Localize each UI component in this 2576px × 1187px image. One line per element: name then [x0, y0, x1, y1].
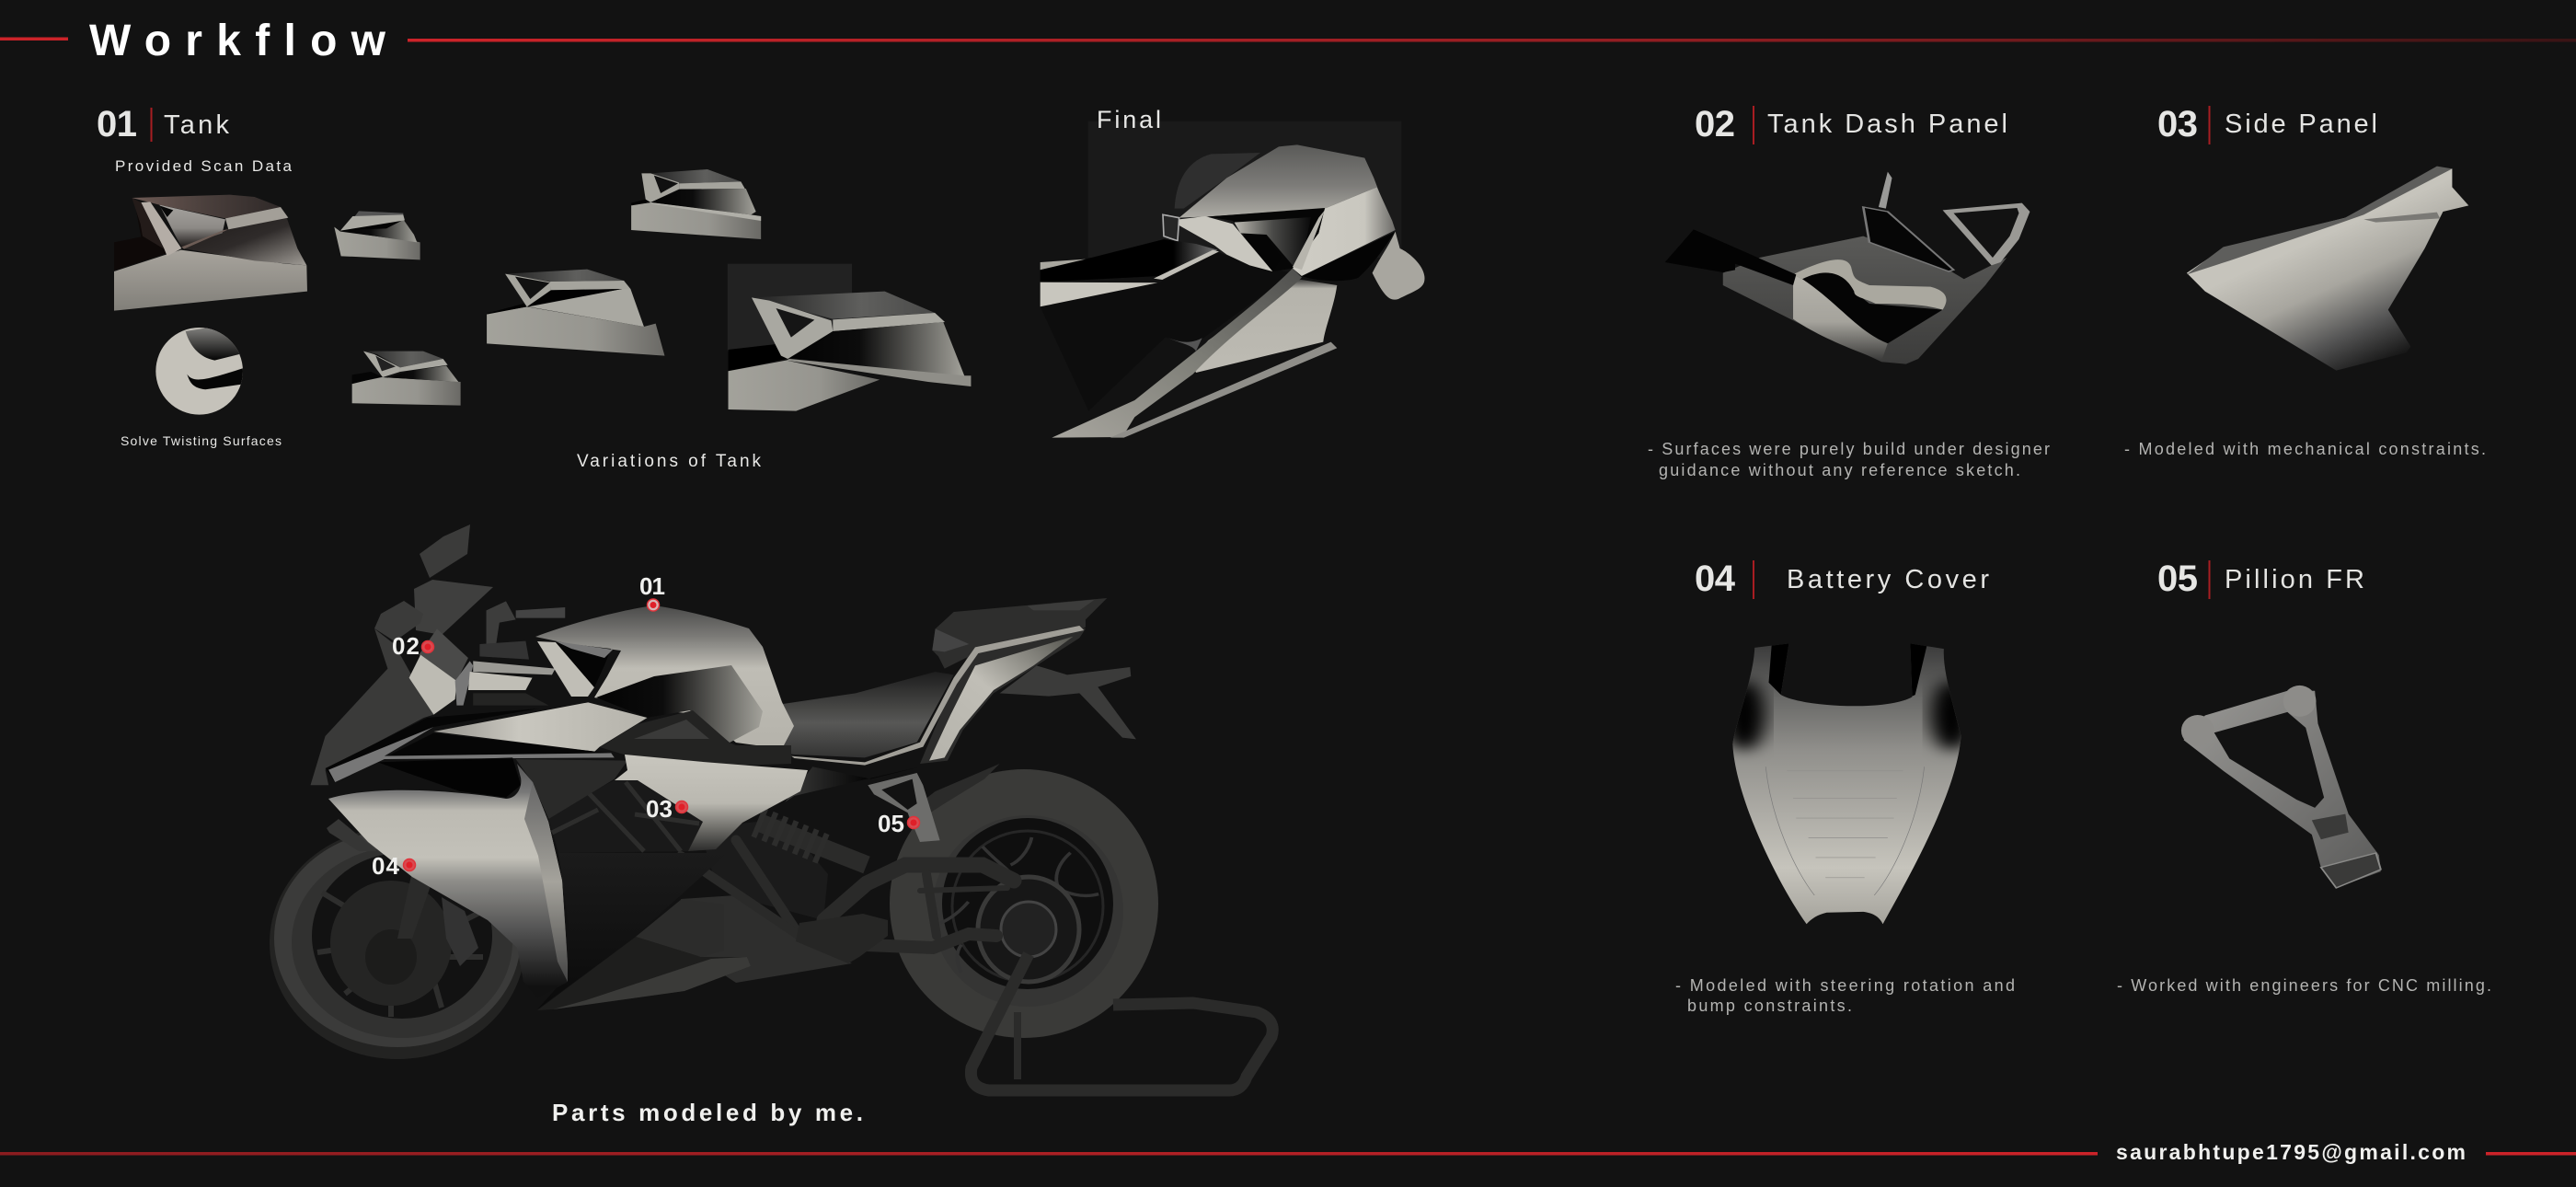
footer email: saurabhtupe1795@gmail.com [2116, 1140, 2466, 1164]
image: motorcycle side view [270, 524, 1272, 1090]
text: battery cover note: bump constraints. [1687, 997, 1852, 1015]
marker 02 [392, 632, 434, 660]
text: battery cover note [1675, 976, 2015, 1015]
text: tank dash panel note [1648, 440, 2050, 479]
section heading: 03 Side Panel [2157, 104, 2377, 144]
section heading: 02 Tank Dash Panel: Tank Dash Panel [1767, 109, 2007, 139]
label: solve twisting surfaces: Solve Twisting Surfaces [121, 433, 282, 448]
panel 03 [615, 755, 808, 851]
frame and swingarm [681, 840, 1014, 948]
windscreen and mirror [374, 524, 493, 641]
image: final tank assembly [1041, 121, 1424, 438]
marker 02: 02 [392, 632, 420, 660]
footer rule right [2486, 1152, 2576, 1156]
image: twisting surface detail [155, 325, 246, 415]
section heading: 01 Tank [97, 104, 230, 144]
section heading: 02 Tank Dash Panel: 02 [1695, 104, 1735, 144]
marker 04: 04 [372, 852, 400, 880]
belly pan [537, 853, 728, 1009]
section heading: 01 Tank: 01 [97, 104, 137, 144]
image: battery cover [1723, 643, 1972, 924]
section heading: 04 Battery Cover: Battery Cover [1787, 565, 1989, 594]
tank lower trim [600, 710, 791, 766]
title: Workflow [89, 17, 386, 65]
marker 01: 01 [639, 572, 665, 600]
image: tank variation middle [487, 270, 664, 356]
marker 03: 03 [646, 795, 673, 823]
label: final: Final [1097, 106, 1161, 133]
image: side panel [2187, 167, 2468, 371]
label: variations of tank: Variations of Tank [577, 452, 762, 471]
image: tank variation top [631, 169, 761, 239]
section heading: 03 Side Panel: 03 [2157, 104, 2198, 144]
section heading: 04 Battery Cover [1695, 559, 1989, 599]
text: side panel note: - Modeled with mechanical constraints. [2124, 440, 2486, 458]
header rule right [408, 39, 2576, 42]
section heading: 05 Pillion FR: Pillion FR [2225, 565, 2364, 594]
section heading: 01 Tank: Tank [164, 110, 230, 140]
text: tank dash panel note: guidance without any reference sketch. [1659, 461, 2020, 479]
fairing centre light panel [328, 702, 648, 819]
image: tank variation lower [352, 351, 461, 406]
header rule left [0, 37, 68, 40]
section heading: 05 Pillion FR [2157, 559, 2364, 599]
marker 05 [878, 810, 920, 837]
frame window behind fairing [548, 780, 703, 853]
text: battery cover note: - Modeled with steering rotation and [1675, 976, 2015, 995]
section heading: 05 Pillion FR: 05 [2157, 559, 2198, 599]
marker 04 [372, 852, 416, 880]
rear bodywork [773, 598, 1136, 842]
handlebar and controls [479, 601, 565, 660]
front wheel [270, 819, 525, 1059]
rear shock [757, 822, 867, 865]
rear wheel [890, 769, 1158, 1038]
footer rule left [0, 1152, 2098, 1156]
image: pillion footrest bracket [2181, 686, 2381, 888]
frame block behind engine [681, 895, 852, 983]
panel 04 [328, 764, 568, 998]
panel 04 ribbed strip [524, 782, 568, 982]
image: tank variation large with backdrop [728, 264, 971, 411]
section heading: 04 Battery Cover: 04 [1695, 559, 1736, 599]
paddock stand [971, 954, 1272, 1090]
caption: parts modeled by me: Parts modeled by me. [552, 1099, 863, 1126]
marker 05: 05 [878, 810, 904, 837]
label: provided scan data: Provided Scan Data [115, 157, 293, 175]
image: tank dash panel [1665, 172, 2030, 364]
section heading: 02 Tank Dash Panel [1695, 104, 2007, 144]
image: tank variation small top-left [334, 211, 420, 259]
marker 03 [646, 795, 688, 823]
section heading: 03 Side Panel: Side Panel [2225, 109, 2377, 139]
image: scan data tank [114, 195, 307, 311]
upper fairing and cockpit [310, 628, 556, 785]
text: tank dash panel note: - Surfaces were purely build under designer [1648, 440, 2050, 458]
tank [535, 605, 794, 745]
text: pillion note: - Worked with engineers for CNC milling. [2117, 976, 2491, 995]
